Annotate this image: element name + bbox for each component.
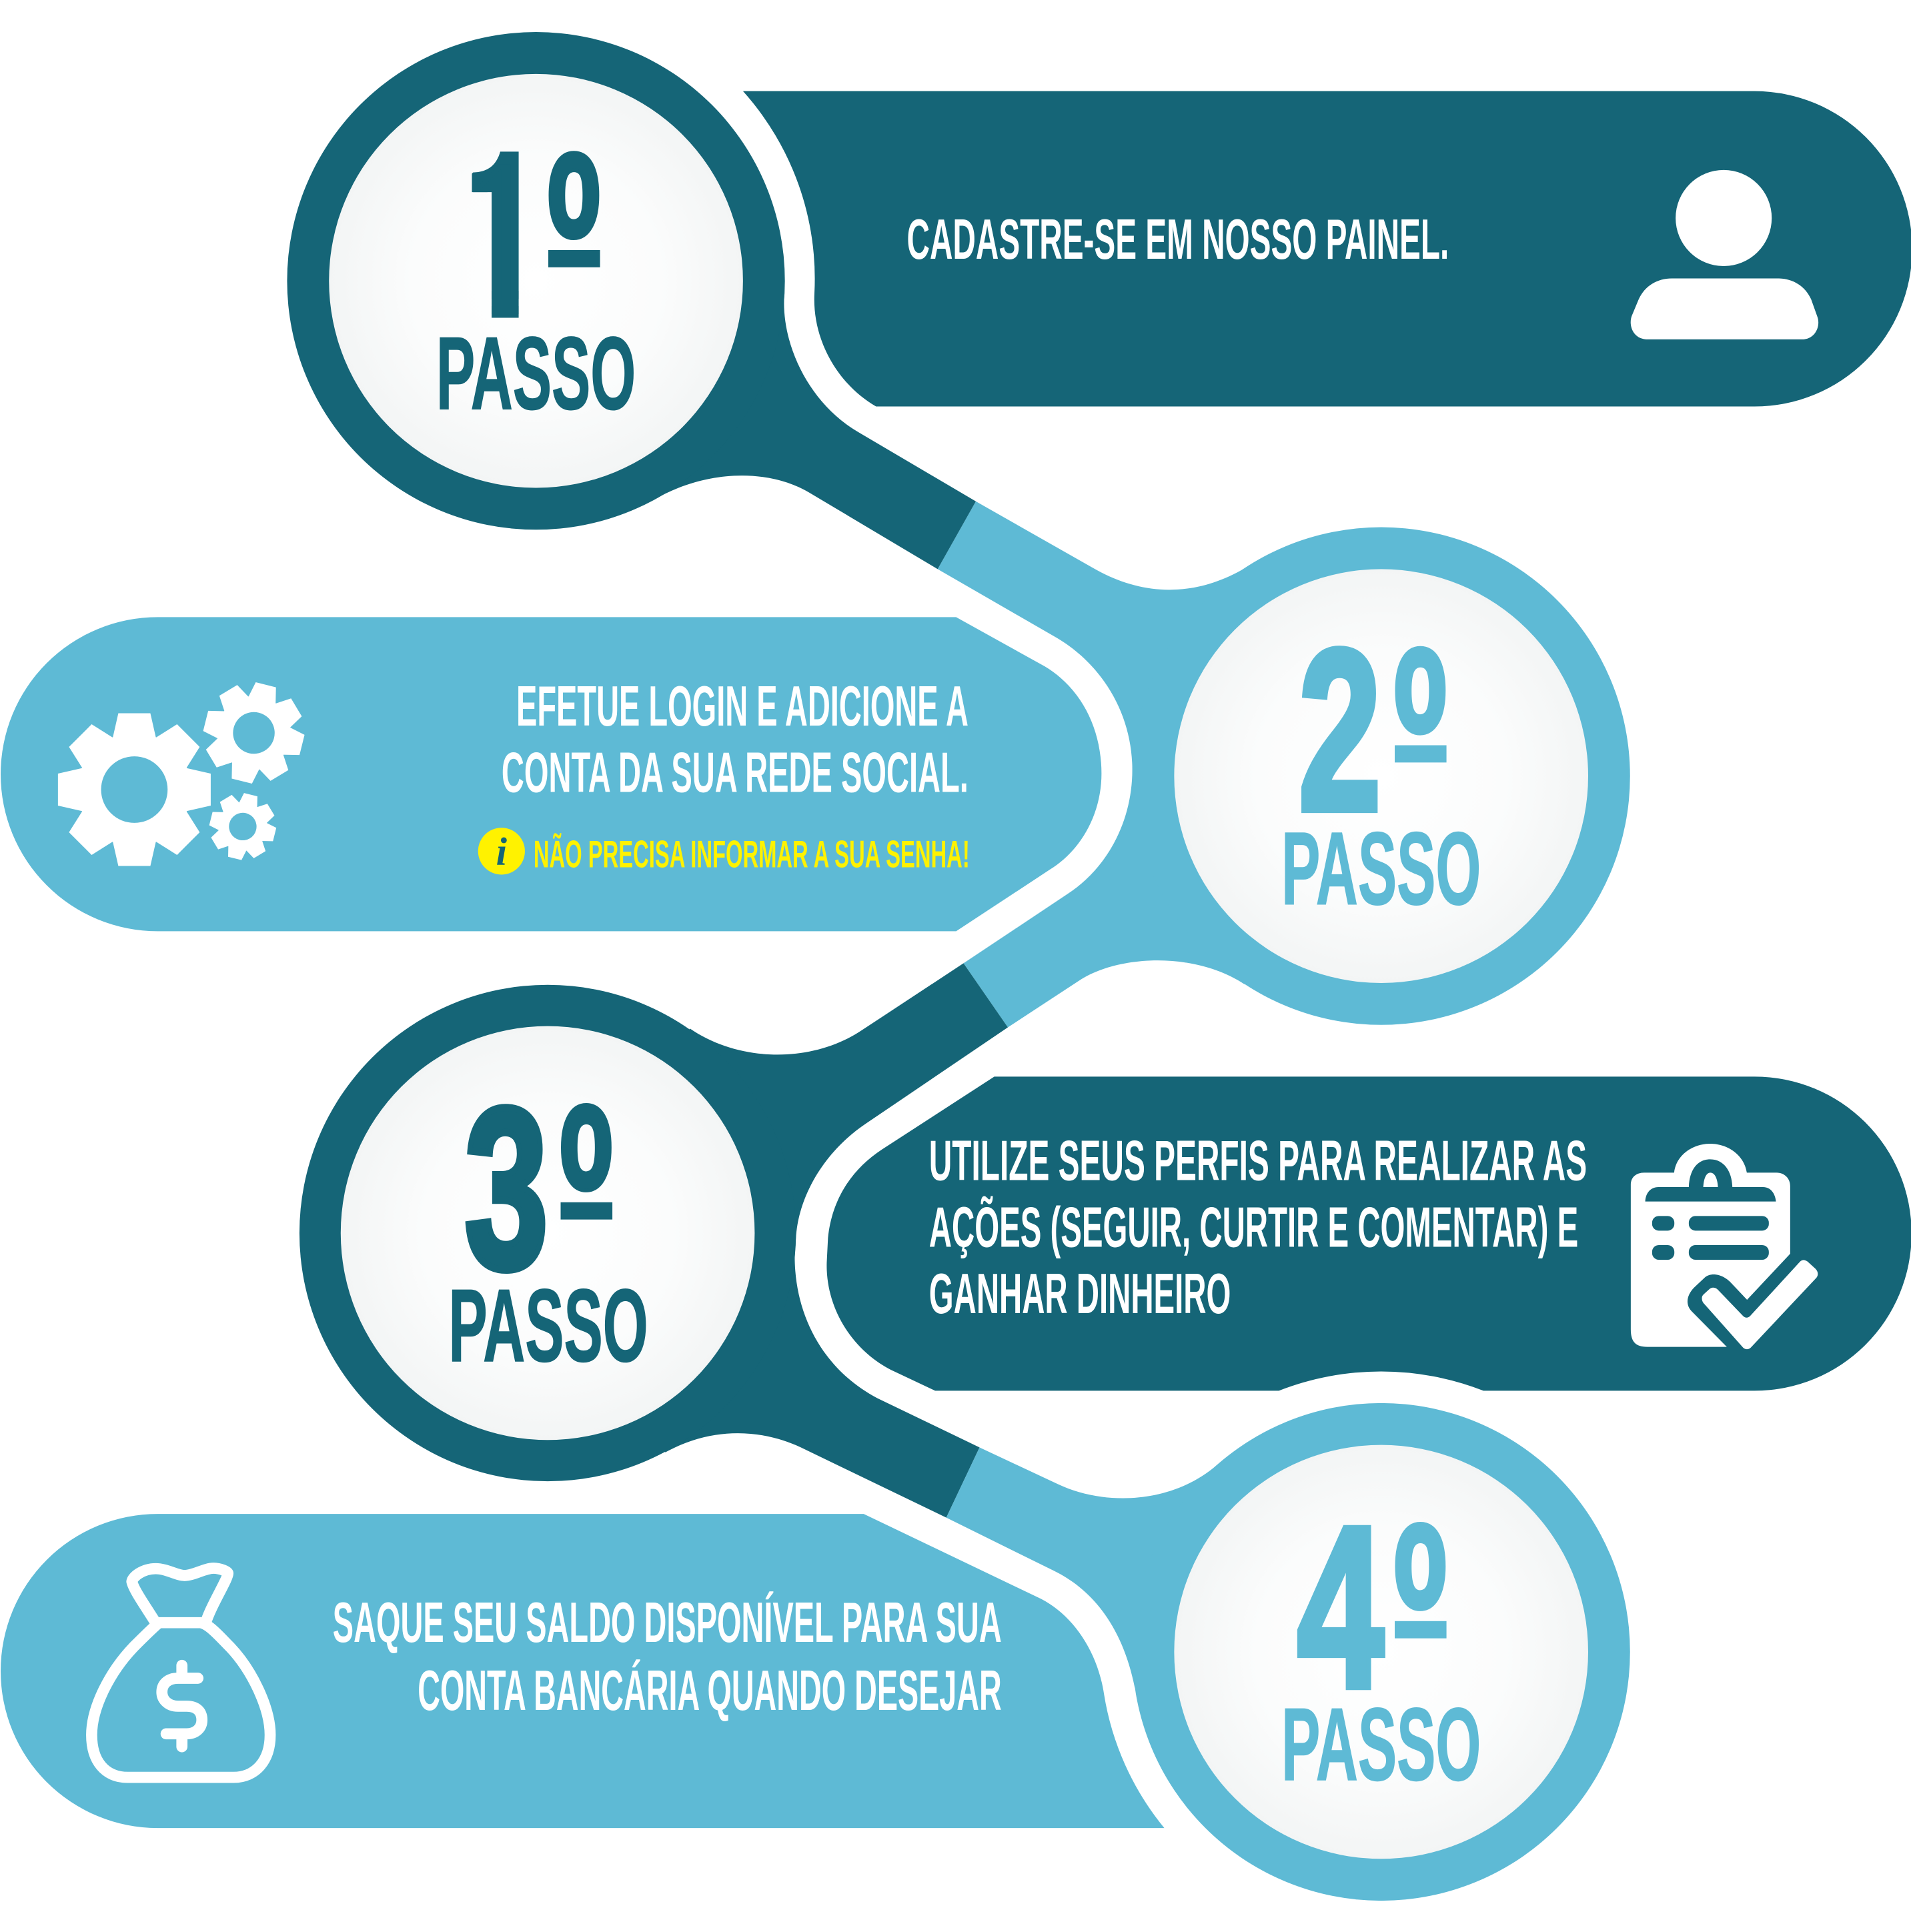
badge: 2º passo: 2 xyxy=(1299,602,1381,858)
panel: step 1 xyxy=(743,91,1911,407)
badge: 1º passo: º xyxy=(546,99,601,381)
badge: 2º passo: º xyxy=(1393,595,1447,877)
badge: 4º passo xyxy=(1133,1403,1630,1901)
icon: gears xyxy=(58,673,314,866)
step 4 text: SAQUE SEU SALDO DISPONÍVEL PARA SUA xyxy=(333,1591,1002,1655)
badge: 1º passo xyxy=(287,32,785,530)
step 2 text xyxy=(502,675,969,805)
connector: dark step 3 xyxy=(548,963,1008,1518)
connector: light step 4 xyxy=(946,1447,1381,1688)
icon: user xyxy=(1631,170,1818,339)
step 3 text: GANHAR DINHEIRO xyxy=(929,1262,1231,1326)
badge: 3º passo: PASSO xyxy=(448,1268,648,1383)
badge: 4º passo: º xyxy=(1393,1471,1447,1753)
note: yellow warning: NÃO PRECISA INFORMAR A SUA SENHA! xyxy=(534,833,970,876)
note: yellow warning xyxy=(478,828,970,876)
note: yellow warning: i xyxy=(496,830,508,874)
step 4 text: CONTA BANCÁRIA QUANDO DESEJAR xyxy=(418,1659,1002,1723)
step 2 text: EFETUE LOGIN E ADICIONE A xyxy=(516,675,969,738)
badge: 3º passo xyxy=(299,985,796,1481)
icon: clipboard with check xyxy=(1631,1144,1818,1349)
panel: step 2 xyxy=(1,617,1101,931)
badge: 4º passo: 4 xyxy=(1297,1479,1385,1735)
step 4 text xyxy=(333,1591,1002,1723)
step 3 text xyxy=(929,1130,1587,1326)
panel: step 4 xyxy=(1,1514,1165,1828)
badge: 3º passo: 3 xyxy=(464,1060,548,1316)
badge: 1º passo: PASSO xyxy=(436,315,636,431)
panel: step 3 xyxy=(826,1076,1911,1390)
badge: 4º passo: PASSO xyxy=(1281,1687,1481,1802)
connector: dark step 1 xyxy=(536,281,976,569)
step 2 text: CONTA DA SUA REDE SOCIAL. xyxy=(502,742,969,805)
badge: 3º passo: º xyxy=(559,1052,613,1334)
icon: money bag xyxy=(91,1568,270,1777)
connector: light step 2 xyxy=(938,502,1381,1027)
badge: 1º passo: 1 xyxy=(464,107,542,363)
step 1 text: CADASTRE-SE EM NOSSO PAINEL. xyxy=(907,208,1449,271)
badge: 2º passo xyxy=(1133,528,1630,1025)
badge: 2º passo: PASSO xyxy=(1281,811,1481,926)
